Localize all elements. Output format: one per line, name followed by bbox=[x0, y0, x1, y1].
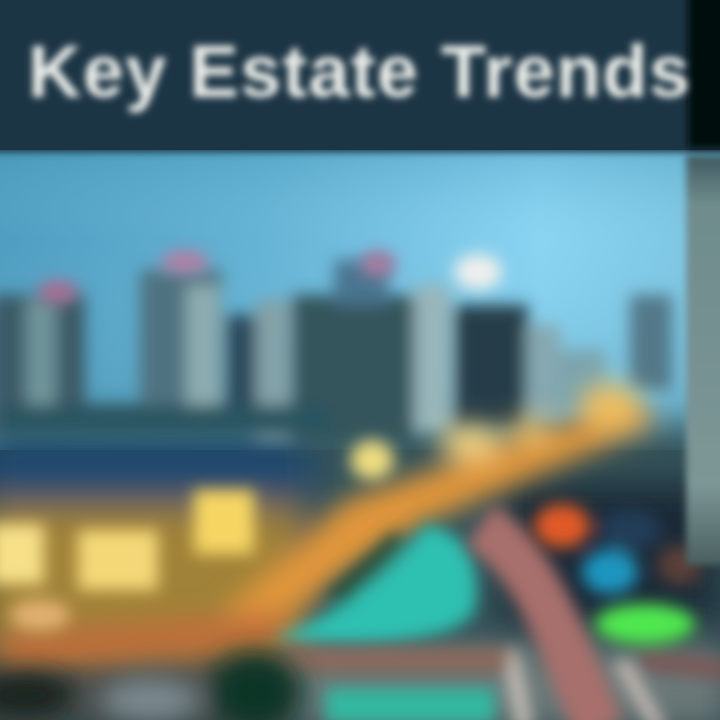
curved road bbox=[280, 525, 720, 720]
lower city ground bbox=[0, 425, 720, 720]
teal pool bbox=[270, 525, 495, 720]
coloured city lights bbox=[534, 504, 702, 644]
building tops bbox=[38, 251, 502, 303]
glowing yellow blocks bbox=[0, 440, 394, 631]
skyline buildings bbox=[0, 260, 672, 445]
orange road and lights bbox=[0, 383, 655, 668]
foreground dark trees bbox=[0, 652, 301, 720]
header band bbox=[0, 0, 720, 152]
sky bbox=[0, 150, 720, 450]
title: Key Estate Trends bbox=[28, 30, 690, 113]
right foreground building bbox=[686, 155, 720, 565]
